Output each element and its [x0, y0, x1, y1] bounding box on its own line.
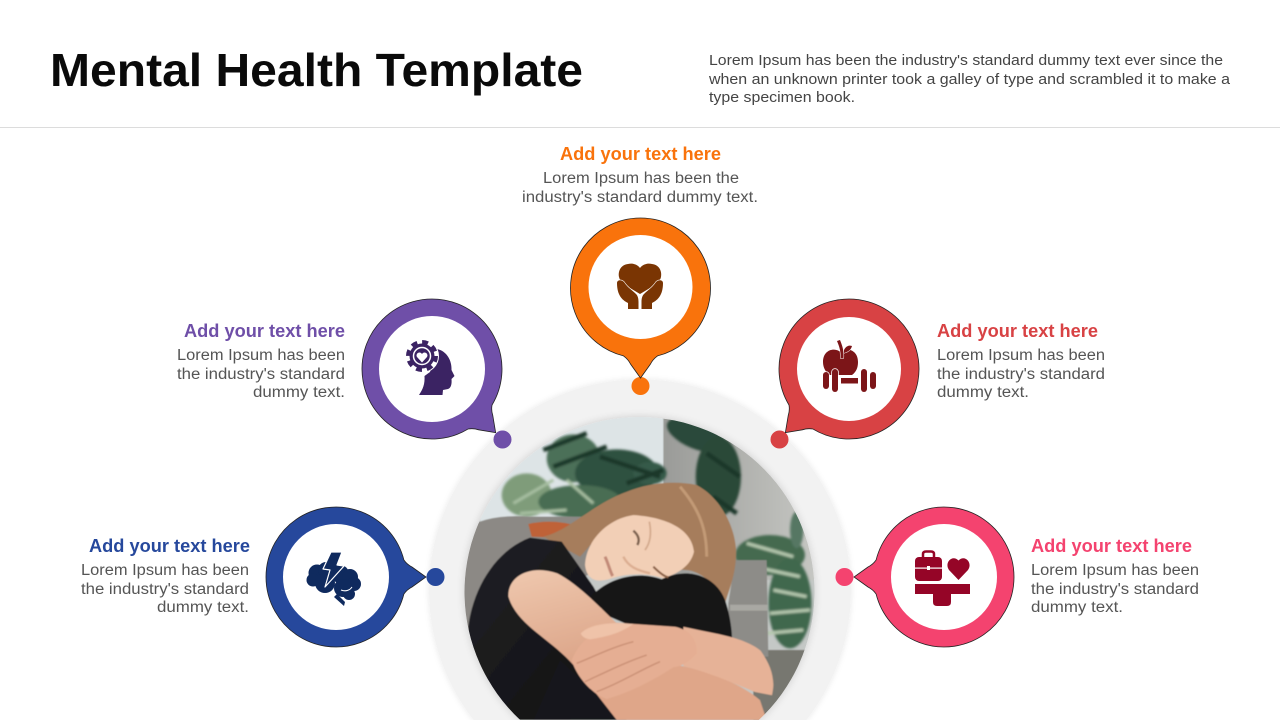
blue pin: stress — [266, 507, 426, 647]
orange pin: care — [570, 218, 710, 378]
text block: purple — [177, 321, 345, 401]
text block: pink: dummy text. — [1031, 599, 1123, 616]
shirt — [468, 537, 597, 720]
icon: briefcase and heart on balance — [915, 552, 970, 606]
central ring — [429, 379, 851, 720]
icon: brain with lightning bolt — [306, 552, 361, 606]
text block: blue: the industry's standard — [81, 581, 249, 598]
text block: blue: dummy text. — [157, 599, 249, 616]
photo background — [463, 413, 817, 720]
header description: type specimen book. — [709, 89, 855, 106]
text block: red: Lorem Ipsum has been — [937, 347, 1105, 364]
text block: orange: Add your text here — [560, 144, 721, 164]
text block: orange: industry's standard dummy text. — [522, 189, 758, 206]
text block: blue: Add your text here — [89, 536, 250, 556]
text block: purple: the industry's standard — [177, 366, 345, 383]
text block: purple: dummy text. — [253, 384, 345, 401]
text block: red: the industry's standard — [937, 366, 1105, 383]
purple pin: mind — [333, 270, 545, 482]
text block: red — [937, 321, 1105, 401]
plants — [502, 410, 812, 648]
red pin: nutrition and fitness — [736, 270, 948, 482]
hands — [572, 622, 684, 698]
photo shadow — [464, 417, 814, 720]
header description: when an unknown printer took a galley of type and scrambled it to make a — [708, 71, 1231, 88]
title: Mental Health Template — [50, 44, 583, 96]
sofa and chair — [463, 516, 768, 657]
icon: heart in hands — [617, 264, 663, 309]
header description: Lorem Ipsum has been the industry's standard dummy text ever since the — [709, 52, 1223, 69]
face — [585, 487, 707, 580]
pink pin: work-life balance — [854, 507, 1014, 647]
text block: pink: Add your text here — [1031, 536, 1192, 556]
text block: blue: Lorem Ipsum has been — [81, 562, 249, 579]
text block: pink: the industry's standard — [1031, 581, 1199, 598]
text block: red: dummy text. — [937, 384, 1029, 401]
text block: orange — [522, 144, 758, 206]
text block: purple: Lorem Ipsum has been — [177, 347, 345, 364]
icon: head with gear and heart — [405, 339, 454, 395]
text block: pink — [1031, 536, 1199, 616]
lower leg — [593, 665, 767, 720]
hair — [543, 483, 736, 603]
knees — [570, 572, 732, 720]
text block: red: Add your text here — [937, 321, 1098, 341]
header description — [708, 52, 1231, 106]
text block: pink: Lorem Ipsum has been — [1031, 562, 1199, 579]
text block: purple: Add your text here — [184, 321, 345, 341]
central photo: woman hugging knees — [463, 410, 817, 720]
forearm — [683, 627, 773, 695]
text block: blue — [81, 536, 250, 616]
upper arm — [508, 570, 617, 665]
connector dots on ring — [426, 377, 854, 586]
icon: apple and dumbbell — [823, 340, 876, 392]
text block: orange: Lorem Ipsum has been the — [543, 170, 739, 187]
